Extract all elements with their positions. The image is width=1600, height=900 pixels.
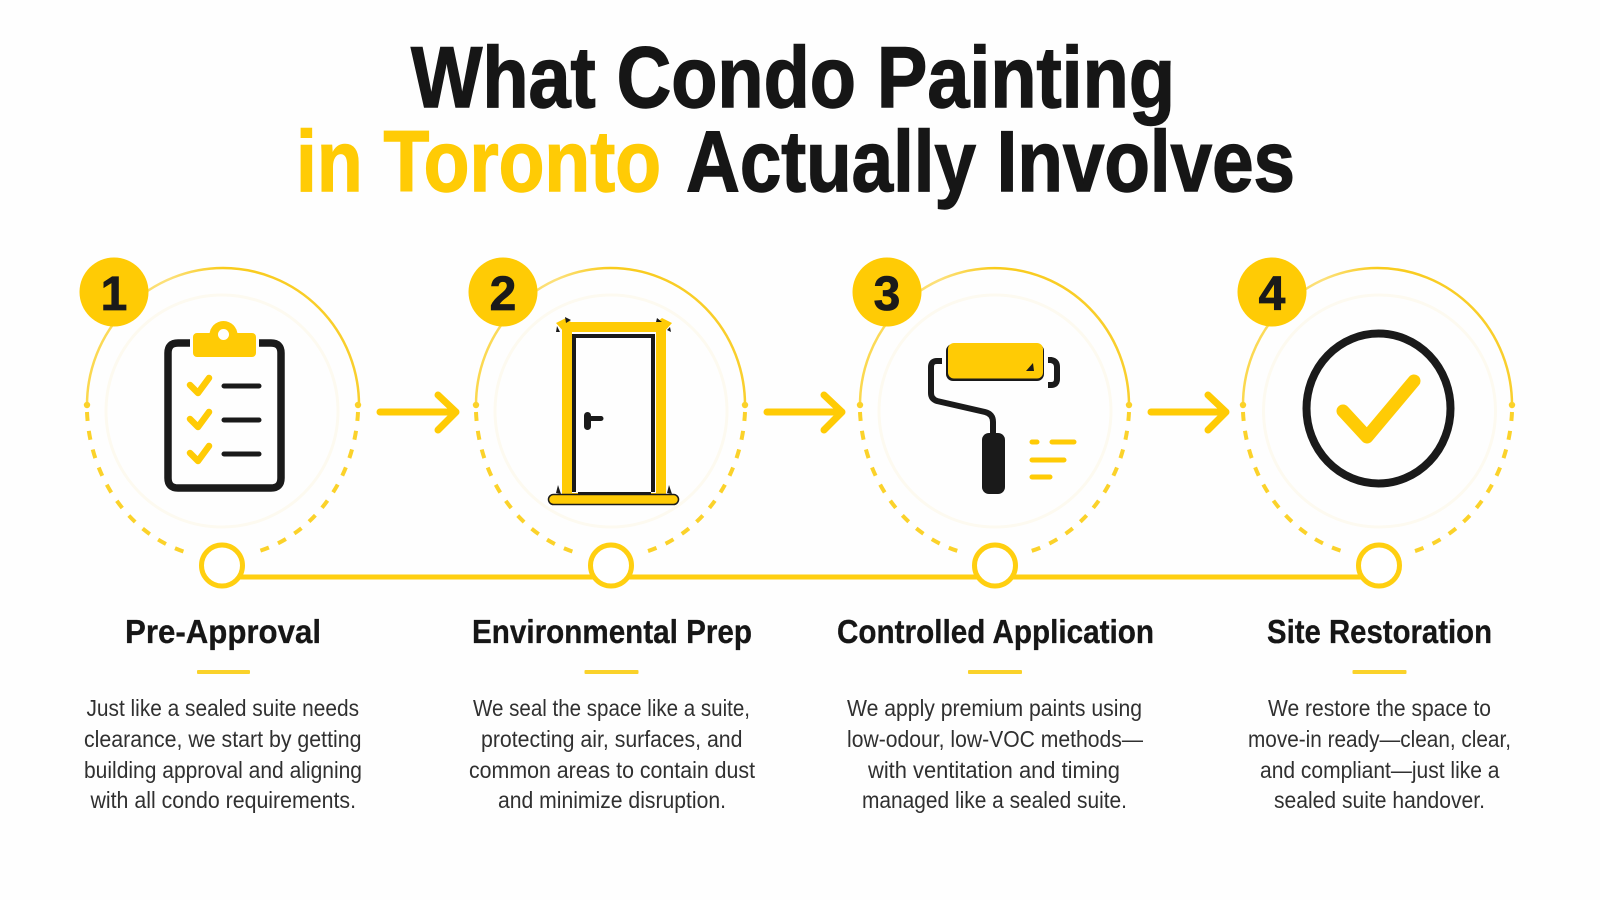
text: pre-approval description: Just like a sealed suite needs — [86, 695, 359, 721]
text: controlled application description: managed like a sealed suite. — [862, 787, 1127, 813]
heading underline 3 — [968, 670, 1022, 674]
step 3 number badge — [852, 258, 922, 326]
panel: step 4 site restoration — [1238, 258, 1515, 813]
heading underline 1 — [197, 670, 250, 674]
timeline node 2 — [590, 545, 632, 586]
panel: step 1 pre-approval — [80, 258, 362, 813]
text: site restoration description: sealed suite handover. — [1274, 787, 1485, 813]
step 3 ring — [857, 268, 1132, 552]
step 1 ring — [84, 268, 361, 552]
timeline node 4 — [1358, 545, 1400, 586]
heading: environmental prep: Environmental Prep — [472, 613, 752, 650]
icon: check mark in circle — [1306, 334, 1450, 484]
panel: step 2 environmental prep — [468, 258, 756, 813]
heading: site restoration: Site Restoration — [1267, 613, 1492, 650]
icon: taped door frame — [548, 317, 678, 504]
heading: controlled application: Controlled Application — [837, 613, 1154, 650]
text: site restoration description: and compliant—just like a — [1260, 757, 1500, 783]
text: site restoration description — [1248, 695, 1511, 813]
icon: clipboard checklist — [168, 321, 281, 488]
text: environmental prep description: We seal the space like a suite, — [473, 695, 750, 721]
text: pre-approval description — [84, 695, 362, 813]
step 4 ring — [1240, 268, 1515, 552]
text: environmental prep description: and minimize disruption. — [498, 787, 726, 813]
text: pre-approval description: with all condo requirements. — [90, 787, 356, 813]
text: site restoration description: move-in ready—clean, clear, — [1248, 726, 1511, 752]
step 1 number badge — [80, 258, 148, 326]
panel: step 3 controlled application — [837, 258, 1154, 813]
step 2 ring — [473, 268, 748, 552]
text: environmental prep description: protecting air, surfaces, and — [481, 726, 742, 752]
text: environmental prep description: common areas to contain dust — [469, 757, 756, 783]
heading underline 2 — [584, 670, 638, 674]
heading underline 4 — [1352, 670, 1406, 674]
timeline node 1 — [202, 545, 242, 586]
text: pre-approval description: clearance, we start by getting — [84, 726, 362, 752]
heading: pre-approval: Pre-Approval — [125, 613, 321, 650]
step 2 number badge: 2 — [490, 268, 516, 321]
text: controlled application description: with ventitation and timing — [867, 757, 1120, 783]
text: site restoration description: We restore the space to — [1268, 695, 1491, 721]
step 4 number badge — [1238, 258, 1306, 326]
step 1 number badge: 1 — [101, 268, 127, 321]
text: controlled application description: We apply premium paints using — [847, 695, 1142, 721]
icon: paint roller — [931, 343, 1074, 494]
timeline node 3 — [974, 545, 1016, 586]
title: in Toronto — [296, 114, 661, 210]
step 2 number badge — [468, 258, 538, 326]
text: environmental prep description — [469, 695, 756, 813]
text: controlled application description — [847, 695, 1143, 813]
title: What Condo Painting — [411, 30, 1175, 126]
step 4 number badge: 4 — [1259, 268, 1286, 321]
timeline connector — [240, 574, 1362, 580]
arrow 3 to 4 — [1151, 395, 1226, 430]
text: pre-approval description: building approval and aligning — [84, 757, 362, 783]
arrow 1 to 2 — [380, 395, 456, 430]
arrow 2 to 3 — [767, 395, 842, 430]
title — [296, 30, 1295, 210]
title: Actually Involves — [686, 114, 1295, 210]
step 3 number badge: 3 — [874, 268, 900, 321]
text: controlled application description: low-odour, low-VOC methods— — [847, 726, 1143, 752]
